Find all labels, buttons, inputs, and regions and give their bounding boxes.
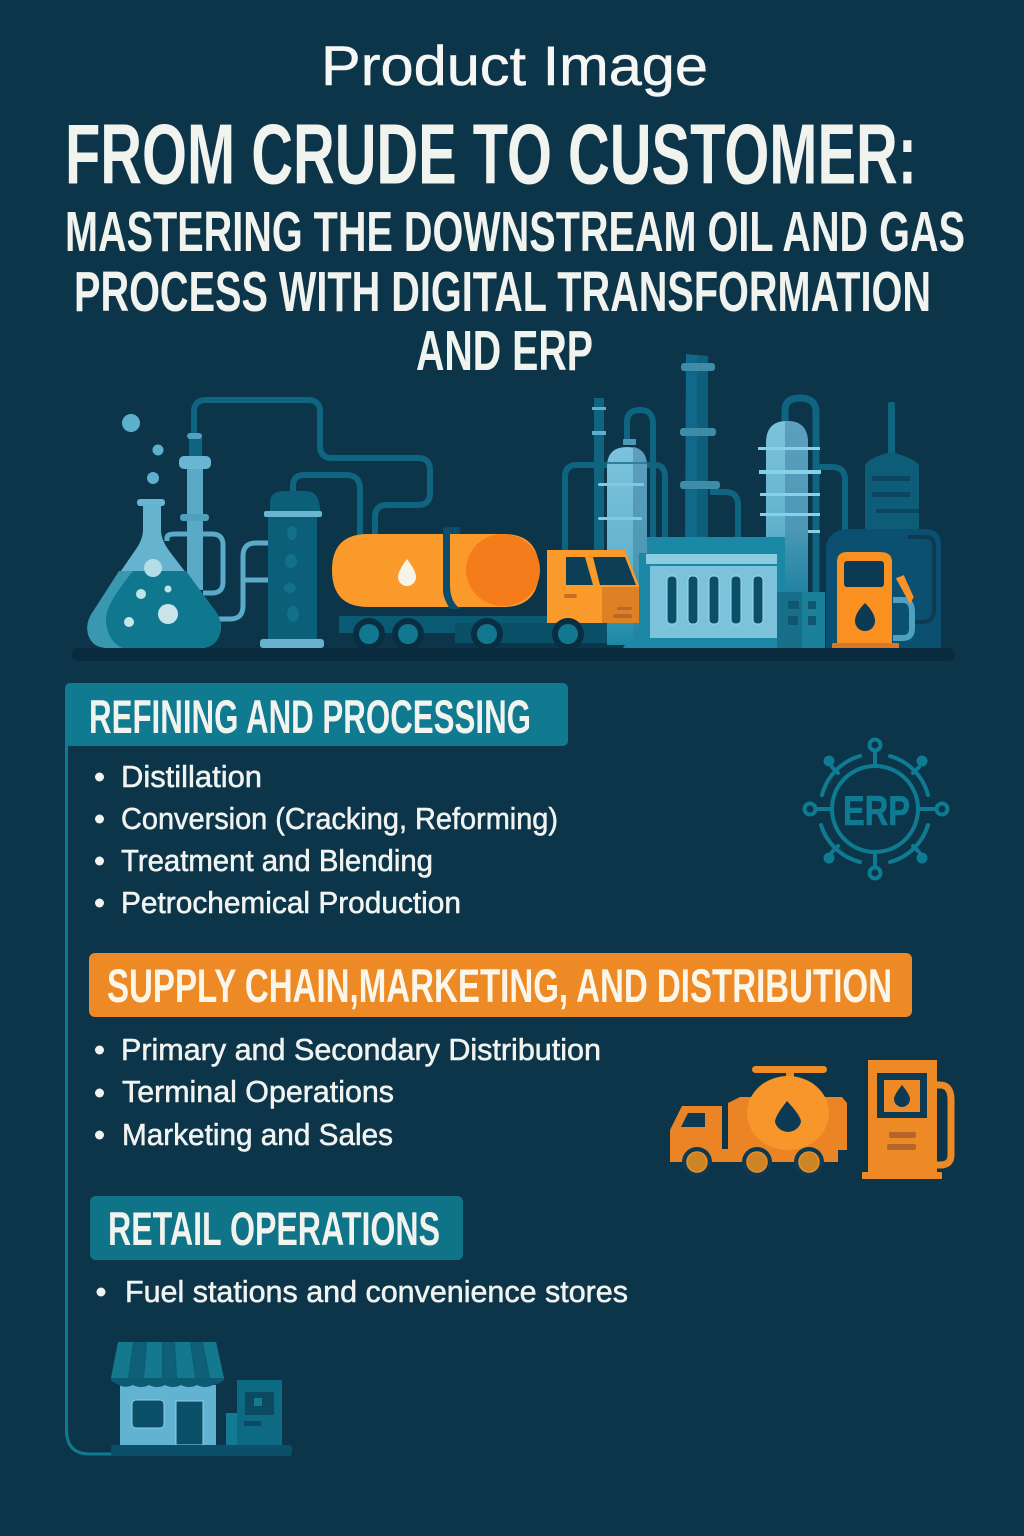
title: AND ERP [416,319,593,383]
back refinery pipes and stacks [565,354,941,648]
list: supply chain: Terminal Operations [122,1075,394,1109]
trailer and wheels [339,616,645,650]
list: retail: Fuel stations and convenience stores [125,1275,628,1309]
heading: retail operations [90,1196,463,1260]
list: supply chain: Marketing and Sales [122,1118,393,1152]
list: refining: Distillation [121,760,262,794]
flask column [167,433,279,619]
right tower [758,421,821,600]
list: supply chain [95,1033,601,1152]
ground line [72,648,954,661]
icon: flask [87,499,221,648]
list: refining [95,760,558,920]
list: supply chain: Primary and Secondary Distribution [121,1033,601,1067]
icon: orange truck [670,1066,847,1177]
hero illustration: downstream process [72,354,954,661]
list: refining: Treatment and Blending [121,844,433,878]
truck cab [547,550,640,650]
icon: ERP: ERP [843,787,910,834]
list: refining: Petrochemical Production [121,886,461,920]
left tower [598,439,647,645]
heading: retail operations: RETAIL OPERATIONS [108,1202,440,1255]
heading: refining and processing [65,683,568,746]
icon: ERP [804,740,948,878]
icon: orange tanker [332,527,540,609]
small annex building [777,592,825,648]
refinery building [623,537,785,648]
icon: store and pump [111,1342,292,1456]
icon: bubbles [122,414,164,484]
icon: orange fuel pump [862,1060,951,1179]
icon: fuel pump [832,552,912,649]
distillation column [260,491,324,648]
heading: refining and processing: REFINING AND PROCESSING [89,690,531,743]
back pipes left [194,400,430,536]
timeline line [66,740,114,1454]
title [65,108,965,383]
list: refining: Conversion (Cracking, Reforming) [121,802,558,836]
supertitle: Product Image [321,34,708,97]
